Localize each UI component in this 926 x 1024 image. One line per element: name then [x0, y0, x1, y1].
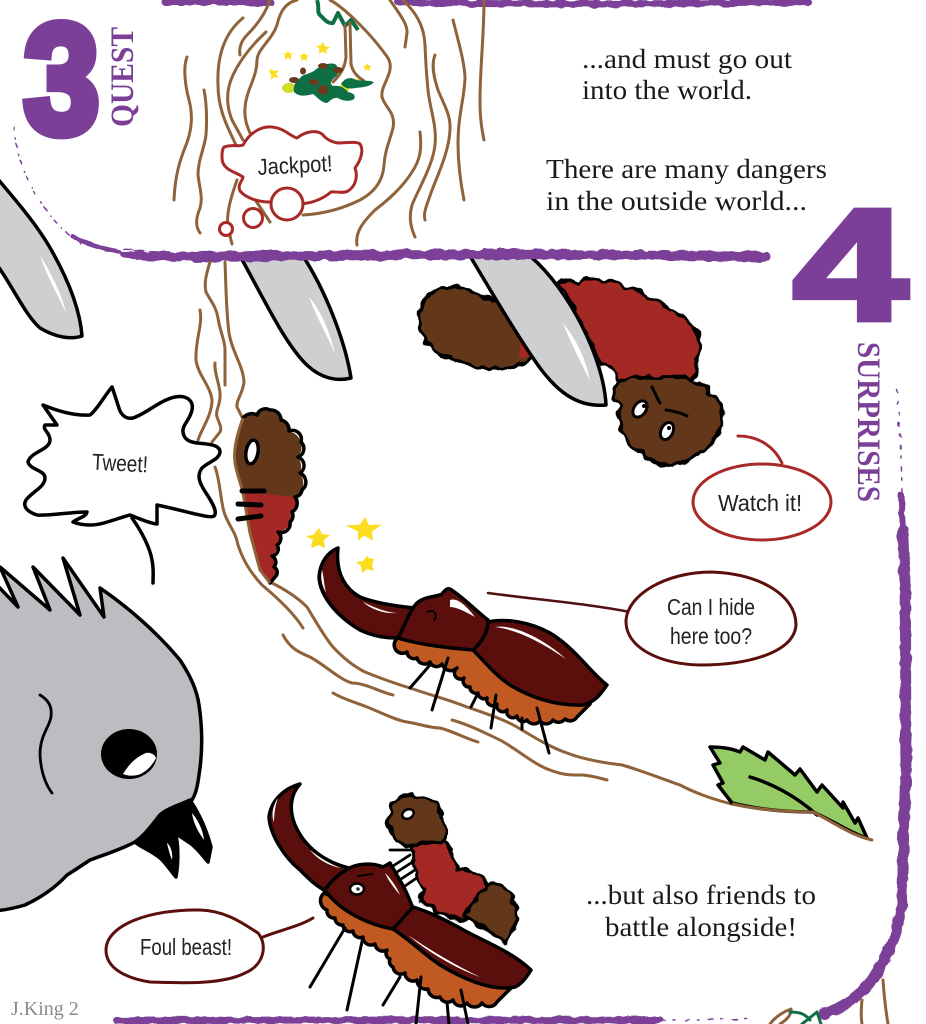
tail segment [420, 286, 535, 369]
wing line [40, 695, 52, 793]
belly [320, 893, 512, 1007]
horn [319, 548, 417, 638]
credit: J.King 2 [11, 998, 79, 1020]
green leaf [710, 747, 872, 840]
brown segment [235, 410, 303, 497]
body segment [560, 279, 700, 382]
text: many dangers [546, 154, 827, 216]
bubble text: Foul beast! [140, 934, 232, 960]
thorax [325, 863, 414, 929]
text: friends: ...but also friends to [586, 880, 816, 910]
rhinoceros beetle with caterpillar rider [269, 784, 531, 1024]
bubble text: Watch it! [718, 490, 802, 516]
heading: QUEST: QUEST [105, 27, 141, 127]
text: friends: battle alongside! [605, 912, 797, 942]
speech line and bubble: Can I hide: here too? [670, 623, 752, 649]
beak [135, 800, 211, 877]
eye [101, 729, 157, 779]
gold stars [268, 42, 372, 80]
rider eye [401, 807, 415, 821]
eyes [630, 398, 676, 442]
grey bird head [0, 558, 211, 911]
speech bubble: Watch it [693, 436, 831, 540]
speech bubble: Tweet [25, 387, 220, 583]
elytra [393, 907, 531, 988]
border: top of panel 3 [165, 2, 808, 4]
belly [394, 638, 590, 724]
rider legs [390, 850, 421, 886]
roots at bottom right corner [770, 980, 888, 1024]
speech bubble: Foul beast [106, 910, 313, 983]
legs [310, 928, 468, 1024]
claw piercing [470, 256, 606, 405]
heading: SURPRISES: SURPRISES [850, 342, 886, 502]
speech line and bubble: Can I hide [488, 572, 796, 665]
caterpillar body [412, 840, 488, 920]
bubble text: Jackpot! [257, 150, 333, 180]
grey talon middle [240, 256, 351, 379]
head segment [614, 376, 723, 466]
grey talon left [0, 178, 82, 338]
highlights [273, 798, 480, 977]
elytra [473, 620, 607, 705]
beetle eye [350, 884, 364, 894]
beak highlights [167, 813, 204, 860]
roots down the trunk [196, 262, 872, 840]
eye [428, 611, 436, 620]
yellow stars [306, 517, 382, 573]
border: right and bottom-right of panel 4 [824, 390, 906, 1014]
thought circles [220, 188, 303, 236]
horn [269, 784, 349, 890]
legs [238, 491, 264, 519]
number 4: 4 [793, 177, 908, 353]
caterpillar under claw [420, 256, 723, 466]
bubble text: Can I hide [667, 594, 755, 620]
red segment [243, 493, 297, 583]
icon: treasure pile [268, 42, 374, 103]
bumpy outline [243, 409, 306, 583]
brows [652, 387, 687, 416]
caterpillar on branch [235, 409, 306, 583]
caterpillar head [389, 795, 446, 846]
text: must go out: into the world. [582, 75, 752, 105]
border: bottom of panel 4 [117, 1019, 750, 1021]
thought bubble: Jackpot [220, 127, 362, 236]
thorax [398, 589, 488, 650]
rhinoceros beetle with stars [319, 548, 607, 753]
text: many dangers: in the outside world... [546, 186, 807, 216]
brow [358, 874, 372, 876]
border: bottom of panel 3 [15, 128, 766, 257]
legs [410, 658, 549, 753]
text: must go out: ...and must go out [582, 44, 793, 74]
text: many dangers: There are many dangers [546, 154, 827, 184]
text: friends [586, 880, 816, 942]
root tangle inside panel 3 [174, 0, 484, 245]
text: must go out [582, 44, 793, 105]
eye [244, 439, 260, 465]
bubble text: Tweet! [91, 449, 149, 477]
caterpillar tail [463, 884, 517, 943]
highlights [321, 570, 566, 659]
icon: hanging vine [317, 0, 364, 82]
